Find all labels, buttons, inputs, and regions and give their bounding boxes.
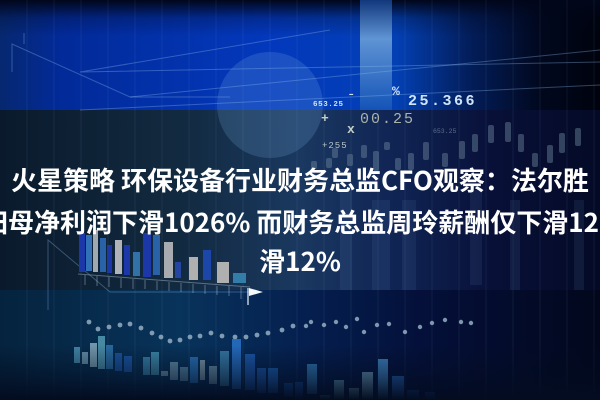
percent sign: % xyxy=(392,84,400,99)
value 00.25: 00.25 xyxy=(360,111,415,128)
title line 3: 滑12% xyxy=(259,242,341,279)
minus sign: - xyxy=(347,87,355,103)
axis with tick marks xyxy=(78,274,250,299)
dim columns behind the title xyxy=(340,190,584,290)
background: deep blue lower band xyxy=(0,290,600,400)
background: blue upper band xyxy=(0,0,600,110)
value 653.25: 653.25 xyxy=(313,101,344,109)
pie circle xyxy=(217,52,323,158)
value +255: +255 xyxy=(322,141,348,151)
title line 1: 火星策略 环保设备行业财务总监CFO观察：法尔胜 xyxy=(11,161,589,198)
bar chart: lower bars xyxy=(74,336,435,400)
line chart: perspective lines xyxy=(12,30,600,310)
candlestick chart xyxy=(311,122,581,171)
title line 2: 归母净利润下滑1026% 而财务总监周玲薪酬仅下滑12 xyxy=(0,203,599,240)
times sign: x xyxy=(347,122,355,137)
bar chart: upper perspective bars xyxy=(79,230,246,283)
value 25.366: 25.366 xyxy=(408,93,477,110)
plus sign: + xyxy=(321,111,329,126)
dot series xyxy=(87,317,473,343)
value 653.25 faded: 653.25 xyxy=(433,128,457,135)
background: slate middle band xyxy=(0,110,600,290)
light beam column xyxy=(360,0,392,110)
numeric readouts xyxy=(313,84,477,151)
bottom shading xyxy=(0,345,600,400)
flag marker xyxy=(248,288,263,305)
